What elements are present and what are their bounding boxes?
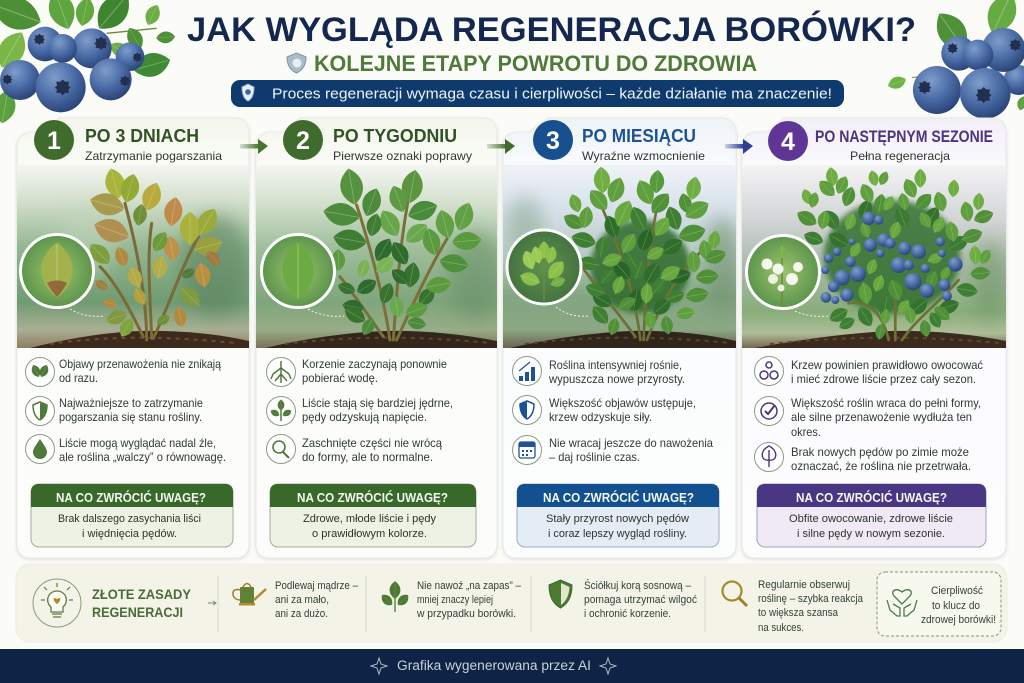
rule text: mniej znaczy lepiej [417,594,493,606]
bullet text: ale silne przenawożenie wydłuża ten [791,411,972,424]
bullet text: Korzenie zaczynają ponownie [302,358,447,371]
callout [517,484,719,547]
photo: strengthened bush [503,165,740,348]
callout: patience: zdrowej borówki! [921,614,996,626]
icon: watering can [233,584,266,606]
bullet text: od razu. [59,372,98,385]
callout: NA CO ZWRÓCIĆ UWAGĘ? [297,490,448,505]
subheading: Zatrzymanie pogarszania [85,149,222,163]
heading: PO 3 DNIACH [85,126,199,146]
bullet text: krzew odzyskuje siły. [549,411,652,424]
rule text [758,579,863,634]
bullet text [59,358,221,385]
icon: sprout [266,396,296,426]
rule text: Nie nawoź „na zapas” – [417,580,521,592]
icon: shield [26,396,54,426]
icon: magnifier [722,582,747,606]
bullet text: Najważniejsze to zatrzymanie [59,397,203,410]
icon: subtitle shield [287,53,306,73]
bullet text [549,397,696,424]
step badge [34,120,74,160]
bullet text: pogarszania się stanu rośliny. [59,411,202,424]
bullet text [302,358,447,385]
arrow [208,601,216,605]
bullet text [791,397,981,439]
callout: Stały przyrost nowych pędów [546,513,690,525]
heading: PO TYGODNIU [333,126,457,146]
icon: check [754,396,784,426]
bullet text: Większość roślin wraca do pełni formy, [791,397,981,410]
step badge: 2 [296,127,310,155]
bullet text: Krzew powinien prawidłowo owocować [791,359,983,372]
icon: leaves [26,358,54,386]
callout: i silne pędy w nowym sezonie. [797,528,945,540]
step badge: 3 [546,127,560,155]
rule text [416,580,521,620]
icon: calendar [512,436,542,464]
bullet text: wypuszcza nowe przyrosty. [548,373,685,386]
rule text: ani za dużo. [275,608,328,620]
heading: PO NASTĘPNYM SEZONIE [815,128,993,146]
step badge: 1 [47,127,61,155]
bullet text: – daj roślinie czas. [549,451,640,464]
heading: PO MIESIĄCU [582,126,696,146]
rule text: ani za mało, [275,594,329,606]
arrow: step 3 to 4 [725,139,753,154]
photo: recovering plant [256,165,503,348]
heading: ZŁOTE ZASADY [92,586,192,602]
bullet text: do formy, ale to normalne. [302,451,433,464]
subtitle: KOLEJNE ETAPY POWROTU DO ZDROWIA [314,51,757,76]
panel: step 1 [17,118,250,558]
panel: step 4 [742,118,1008,558]
icon: magnifier [266,434,296,464]
bullet text [549,437,714,464]
arrow: step 1 to 2 [240,139,268,154]
subheading: Pełna regeneracja [850,149,950,163]
bullet text: Brak nowych pędów po zimie może [791,446,969,459]
callout: patience: Cierpliwość [931,585,984,597]
callout: patience [877,572,1001,636]
callout: NA CO ZWRÓCIĆ UWAGĘ? [543,490,694,505]
callout: Brak dalszego zasychania liści [58,513,201,525]
bullet text: ale roślina „walczy” o równowagę. [59,451,226,464]
bullet text: pobierać wodę. [302,372,378,385]
title: JAK WYGLĄDA REGENERACJA BORÓWKI? [187,11,916,49]
callout: i coraz lepszy wygląd rośliny. [548,528,687,540]
panel: step 2 [256,118,503,558]
icon: shield [549,580,572,608]
photo: stressed plant [17,165,250,348]
callout: patience: to klucz do [932,600,980,612]
bullet text: Objawy przenawożenia nie znikają [59,358,221,371]
icon: growth chart [512,356,542,386]
callout [31,484,233,547]
callout: Zdrowe, młode liście i pędy [303,513,436,525]
step badge [533,120,573,160]
rule text: Ściółkuj korą sosnową – [584,579,691,592]
rule text: pomaga utrzymać wilgoć [584,594,698,606]
panel: golden rules [16,564,1007,642]
rule text: na sukces. [758,622,804,634]
bullet text: i mieć zdrowe liście przez cały sezon. [791,373,976,386]
rule text: w przypadku borówki. [416,608,516,620]
bullet text: Nie wracaj jeszcze do nawożenia [549,437,714,450]
subheading: Wyraźne wzmocnienie [582,149,705,163]
panel: step 3 [503,118,740,558]
heading: REGENERACJI [92,604,183,620]
bullet text [302,437,443,464]
inset: healthy leaf [262,234,344,316]
rule text: Regularnie obserwuj [758,579,850,591]
bullet text: okres. [791,426,821,439]
subheading: Pierwsze oznaki poprawy [333,149,472,163]
icon: roots [266,358,296,386]
bullet text [59,397,203,424]
inset: damaged leaf [20,234,104,316]
bullet text: Roślina intensywniej rośnie, [549,359,682,372]
icon: berries [754,356,784,386]
step badge: 4 [781,128,795,156]
inset: young shoots [507,230,590,316]
step badge [768,121,808,161]
blueberry cluster: top left [0,0,176,125]
bullet text [791,446,971,473]
bullet text [791,359,983,386]
photo: fruiting bush [742,165,1008,348]
bullet text: oznaczać, że roślina nie przetrwała. [791,460,971,473]
callout: NA CO ZWRÓCIĆ UWAGĘ? [56,490,206,505]
bullet text: pędy odzyskują napięcie. [302,411,427,424]
bullet text: Zaschnięte części nie wrócą [302,437,443,450]
icon: blue shield [512,396,542,424]
blueberry cluster: top right [886,0,1024,119]
icon: light bulb [33,579,81,627]
banner [231,80,844,107]
callout: NA CO ZWRÓCIĆ UWAGĘ? [796,490,947,505]
rule text [275,580,358,620]
icon: tree [754,442,784,472]
callout [270,484,476,547]
heading [92,586,192,620]
icon: water drop [26,434,54,464]
bullet text: Większość objawów ustępuje, [549,397,696,410]
callout: i więdnięcia pędów. [82,528,177,540]
rule text: Podlewaj mądrze – [275,580,358,592]
footer [0,649,1024,683]
bullet text: Liście stają się bardziej jędrne, [302,397,453,410]
rule text [584,579,698,620]
arrow: step 2 to 3 [487,139,515,154]
callout [757,484,986,547]
icon: plant [379,581,411,612]
bullet text: Liście mogą wyglądać nadal źle, [59,437,216,450]
callout: Obfite owocowanie, zdrowe liście [789,513,953,525]
banner: Proces regeneracji wymaga czasu i cierpliwości – każde działanie ma znaczenie! [272,86,832,102]
bullet text [548,359,685,386]
callout: o prawidłowym kolorze. [312,528,427,540]
footer: Grafika wygenerowana przez AI [397,658,591,673]
step badge [283,120,323,160]
bullet text [59,437,226,464]
bullet text [302,397,453,424]
rule text: i ochronić korzenie. [584,608,671,620]
rule text: roślinę – szybka reakcja [758,593,863,605]
rule text: to większa szansa [758,607,838,619]
inset: blossoms [746,236,829,316]
